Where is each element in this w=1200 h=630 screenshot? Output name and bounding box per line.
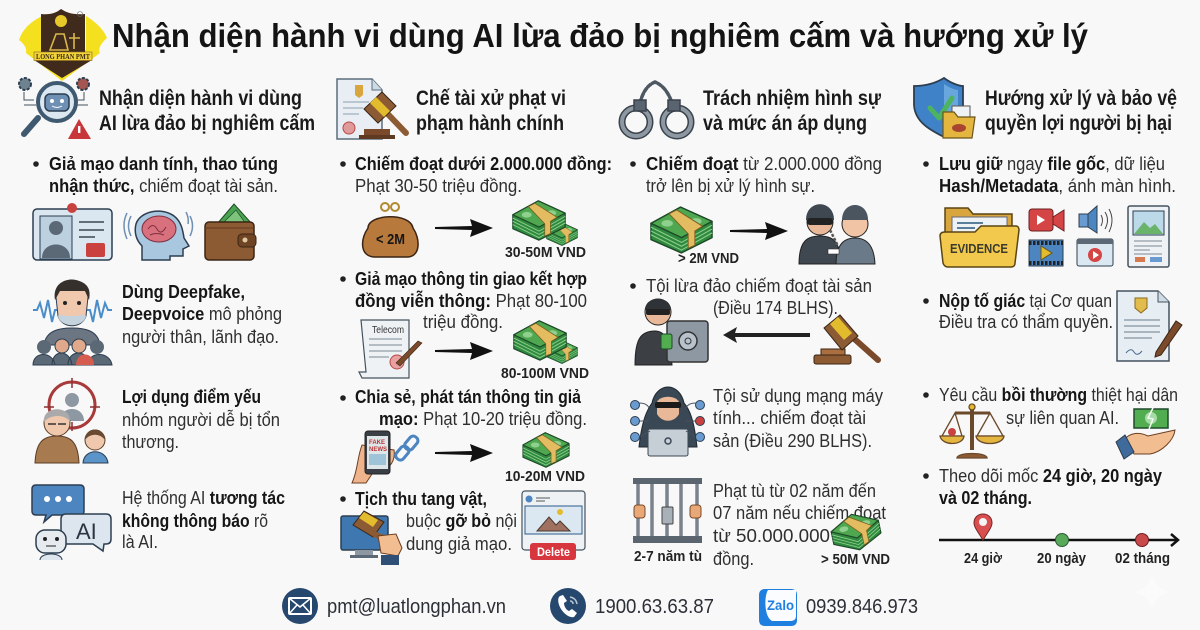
heading: Chế tài xử phạt vi [416, 87, 566, 110]
text: phạt tù: 07 năm nếu chiếm đoạt [713, 503, 886, 523]
timeline: 20 ngày [1037, 550, 1087, 567]
icon: evidence folder: EVIDENCE [950, 241, 1008, 256]
timeline: 02 tháng [1115, 550, 1170, 567]
icon: money 30-50M: 30-50M VND [505, 244, 586, 261]
icon: deepfake face [33, 280, 112, 365]
icon: post with delete button [522, 491, 585, 560]
text: hệ thống AI [122, 488, 285, 552]
bullet: tịch thu tang vật [340, 489, 517, 554]
bullet: giả mạo danh tính: nhận thức, chiếm đoạt tài sản. [49, 176, 278, 196]
text: phạt tù: từ 50.000.000 [713, 526, 830, 546]
panel: trách nhiệm hình sự: và mức án áp dụng [703, 112, 867, 135]
icon: AI chat robot: AI [76, 519, 97, 544]
bullet: giả mạo viễn thông: đồng viễn thông: Phạt 80-100 [355, 290, 587, 311]
bullet: theo dõi mốc [923, 466, 1162, 508]
bullet: chia sẻ thông tin: Chia sẻ, phát tán thông tin giả [355, 387, 582, 407]
bullet: tịch thu tang vật: buộc gỡ bỏ nội [406, 511, 517, 531]
bullet: chia sẻ thông tin [340, 387, 587, 429]
icon: money 10-20M: 10-20M VND [505, 468, 585, 485]
panel: hướng xử lý [914, 78, 1182, 567]
icon: hacker [630, 387, 704, 456]
arrow [435, 444, 493, 462]
bullet: bồi thường: sự liên quan AI. [1006, 408, 1119, 428]
icon: purse under 2M [363, 203, 418, 257]
contact: zalo: 0939.846.973 [806, 596, 918, 618]
icon: phone fake news and chain [352, 431, 420, 483]
text: lợi dụng điểm yếu [122, 387, 280, 452]
icon: video camera [1029, 209, 1064, 231]
icon: browser video [1077, 239, 1113, 266]
bullet: dưới 2 triệu: Phạt 30-50 triệu đồng. [355, 176, 522, 196]
title: Nhận diện hành vi dùng AI lừa đảo bị nghiêm cấm và hướng xử lý [112, 17, 1089, 54]
icon: gavel on monitor [341, 511, 402, 565]
icon: handcuffs [622, 82, 691, 136]
sparkle watermark [1132, 572, 1172, 612]
icon: evidence folder [940, 208, 1019, 267]
bullet: điều 174 [630, 276, 872, 318]
text: phạt tù: đồng. [713, 549, 754, 569]
bullet: giả mạo viễn thông [340, 269, 587, 332]
bullet: nộp tố giác: Nộp tố giác tại Cơ quan [939, 291, 1112, 311]
icon: telecom contract: Telecom [372, 325, 404, 336]
bullet: dưới 2 triệu: Chiếm đoạt dưới 2.000.000 đồng: [355, 154, 612, 174]
bullet: điều 174: Tội lừa đảo chiếm đoạt tài sản [646, 276, 872, 296]
bullet: theo dõi mốc: và 02 tháng. [939, 488, 1032, 508]
icon: brain head [124, 211, 192, 260]
icon: money 80-100M [501, 321, 589, 382]
contact: email: pmt@luatlongphan.vn [327, 596, 506, 618]
icon: money over 2M [651, 207, 739, 267]
bullet: theo dõi mốc: Theo dõi mốc 24 giờ, 20 ngày [939, 466, 1162, 486]
icon: AI magnifier [19, 78, 91, 139]
text: hệ thống AI: là AI. [122, 532, 158, 552]
timeline: 24 giờ [964, 550, 1002, 567]
panel: trách nhiệm hình sự [622, 82, 890, 569]
text: hệ thống AI: Hệ thống AI tương tác [122, 488, 285, 508]
panel: chế tài hành chính [337, 79, 612, 565]
text: deepfake: Deepvoice mô phỏng [122, 304, 282, 324]
icon: thief at safe [635, 299, 708, 365]
contact: email [282, 588, 506, 624]
bullet: tịch thu tang vật: dung giả mạo. [406, 534, 512, 554]
icon: phone fake news and chain: FAKE [369, 440, 385, 446]
text: phạt tù: Phạt tù từ 02 năm đến [713, 481, 876, 501]
icon: gavel [814, 315, 878, 364]
arrow [435, 219, 493, 237]
panel: nhận diện hành vi: AI lừa đảo bị nghiêm cấm [99, 112, 315, 135]
icon: money 80-100M: 80-100M VND [501, 365, 589, 382]
text: lợi dụng điểm yếu: Lợi dụng điểm yếu [122, 387, 261, 407]
text: điều 290: tính... chiếm đoạt tài [713, 408, 866, 428]
bullet: giả mạo danh tính: Giả mạo danh tính, thao túng [49, 154, 278, 174]
icon: broken bill [1134, 408, 1168, 429]
icon: AI chat robot [32, 485, 111, 560]
icon: money over 50M [821, 509, 890, 568]
text: deepfake: người thân, lãnh đạo. [122, 327, 279, 347]
bullet: nộp tố giác [923, 291, 1113, 332]
arrow [435, 342, 493, 360]
text: deepfake [122, 282, 282, 347]
icon: money 10-20M [505, 433, 585, 485]
label: 2-7 năm tù: 2-7 năm tù [634, 548, 702, 565]
icon: shield and folder [914, 78, 975, 138]
bullet: giả mạo viễn thông: triệu đồng. [423, 312, 503, 332]
footer contacts [282, 588, 918, 626]
icon: wallet with cash [205, 204, 256, 260]
logo: Long Phan PMT [19, 9, 107, 81]
arrow [730, 222, 788, 240]
text: lợi dụng điểm yếu: thương. [122, 432, 179, 452]
bullet: giả mạo danh tính [33, 154, 278, 196]
bullet: bồi thường [923, 385, 1178, 428]
contact: phone [550, 588, 714, 624]
text: điều 290 [713, 386, 883, 451]
bullet: nộp tố giác: Điều tra có thẩm quyền. [939, 312, 1113, 332]
bullet: điều 174: (Điều 174 BLHS). [713, 298, 838, 318]
icon: document and gavel [337, 79, 406, 139]
icon: money over 2M: > 2M VND [678, 250, 739, 267]
heading: Nhận diện hành vi dùng [99, 87, 302, 110]
bullet: chia sẻ thông tin: mạo: Phạt 10-20 triệu đồng. [379, 409, 587, 429]
bullet: lưu giữ: Hash/Metadata, ánh màn hình. [939, 176, 1176, 196]
icon: film strip [1029, 240, 1063, 266]
panel: chế tài hành chính: phạm hành chính [416, 112, 564, 135]
icon: post with delete button: Delete [537, 545, 570, 559]
panel: nhận diện hành vi [19, 78, 315, 560]
bullet: giả mạo viễn thông: Giả mạo thông tin giao kết hợp [355, 269, 587, 289]
icon: ID card [33, 203, 112, 260]
icon: document image [1128, 206, 1169, 267]
bullet: lưu giữ: Lưu giữ ngay file gốc, dữ liệu [939, 154, 1165, 174]
logo: Long Phan PMT: LONG PHAN PMT [36, 53, 90, 61]
icon: jail bars [633, 478, 702, 543]
heading: Trách nhiệm hình sự [703, 87, 882, 110]
text: deepfake: Dùng Deepfake, [122, 282, 245, 302]
icon: open hand [1116, 430, 1175, 459]
icon: complaint document and pen [1117, 291, 1182, 361]
bullet: chiếm đoạt từ 2 triệu: Chiếm đoạt từ 2.000.000 đồng [646, 154, 882, 174]
icon: telecom contract [359, 320, 422, 378]
icon: purse under 2M: < 2M [376, 231, 405, 248]
icon: speaker [1079, 206, 1112, 233]
bullet: lưu giữ [923, 154, 1176, 196]
icon: money 30-50M [505, 201, 586, 261]
icon: elderly target [35, 378, 108, 463]
text: hệ thống AI: không thông báo rõ [122, 511, 268, 531]
bullet: tịch thu tang vật: Tịch thu tang vật, [355, 489, 487, 509]
text: lợi dụng điểm yếu: nhóm người dễ bị tổn [122, 409, 280, 430]
bullet: dưới 2 triệu [340, 154, 612, 196]
timeline [939, 514, 1178, 567]
text: điều 290: Tội sử dụng mạng máy [713, 386, 883, 406]
icon: arrested thieves [799, 204, 875, 264]
bullet: chiếm đoạt từ 2 triệu [630, 154, 882, 196]
text: điều 290: sản (Điều 290 BLHS). [713, 431, 872, 451]
arrow: left [723, 327, 810, 343]
icon: money over 50M: > 50M VND [821, 551, 890, 568]
contact: zalo [759, 589, 918, 626]
bullet: bồi thường: Yêu cầu bồi thường thiệt hại dân [939, 385, 1178, 405]
contact: phone: 1900.63.63.87 [595, 596, 714, 618]
bullet: chiếm đoạt từ 2 triệu: trở lên bị xử lý hình sự. [646, 176, 815, 196]
contact: zalo: Zalo [767, 597, 794, 613]
icon: scales [940, 404, 1004, 458]
icon: phone fake news and chain: NEWS [369, 447, 387, 453]
text: phạt tù [713, 481, 886, 569]
